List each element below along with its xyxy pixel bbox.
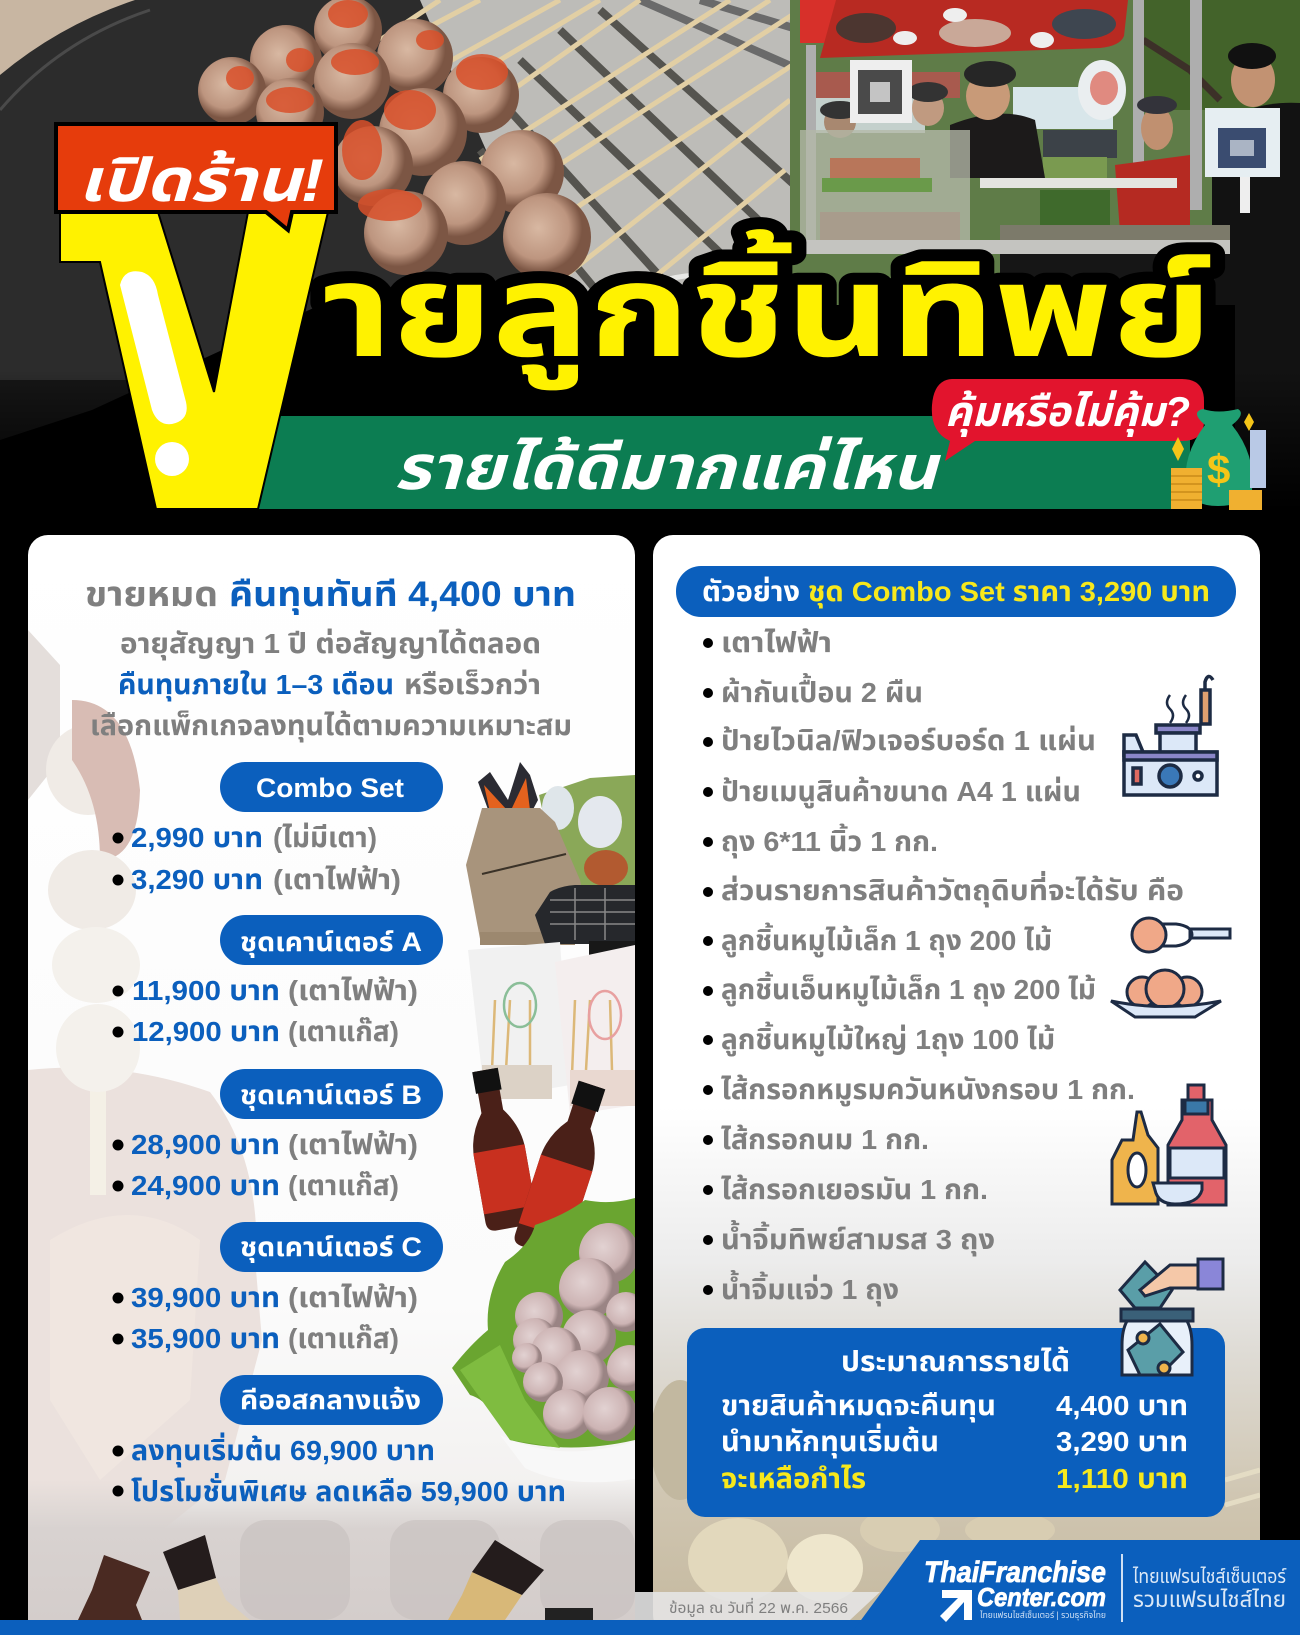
summary rows: 3,290 บาท	[1056, 1426, 1188, 1457]
intro text: หรือเร็วกว่า	[404, 669, 541, 700]
package: Counter B: (เตาไฟฟ้า)	[288, 1129, 418, 1160]
item list: ถุง 6*11 นิ้ว 1 กก.	[721, 823, 938, 858]
heading pill	[676, 566, 1236, 617]
package: Counter B: 28,900 บาท	[131, 1129, 280, 1160]
summary rows: 1,110 บาท	[1056, 1463, 1188, 1494]
package: Counter C: (เตาแก๊ส)	[288, 1323, 399, 1354]
package: outdoor kiosk	[112, 1375, 566, 1507]
intro text: คืนทุนภายใน 1–3 เดือน	[118, 669, 394, 701]
item list: เตาไฟฟ้า	[721, 627, 832, 658]
package: outdoor kiosk: ลงทุนเริ่มต้น 69,900 บาท	[131, 1432, 435, 1467]
package: Counter A	[112, 915, 443, 1047]
badge: grand opening: เปิดร้าน!	[78, 147, 324, 214]
package: Counter B: 24,900 บาท	[131, 1170, 280, 1201]
package: Counter A: 11,900 บาท	[132, 975, 280, 1006]
title black backing band	[0, 305, 1235, 510]
package: Combo Set: (เตาไฟฟ้า)	[273, 864, 401, 895]
main title: ายลูกชิ้นทิพย์	[322, 229, 1212, 390]
package: Combo Set	[112, 762, 443, 895]
package: Counter C: (เตาไฟฟ้า)	[288, 1282, 418, 1313]
item list: ลูกชิ้นหมูไม้เล็ก 1 ถุง 200 ไม้	[721, 922, 1052, 958]
summary rows: นำมาหักทุนเริ่มต้น	[721, 1423, 939, 1458]
footer bar and brand block	[0, 1540, 1300, 1635]
brand logo: ไทยแฟรนไชส์เซ็นเตอร์ | รวมธุรกิจไทย	[979, 1610, 1106, 1620]
yellow letter kho	[60, 212, 328, 509]
panel: combo set contents	[650, 535, 1260, 1635]
package: Counter B: (เตาแก๊ส)	[288, 1170, 399, 1201]
product images: meatball bags	[468, 942, 635, 1115]
package: Combo Set: 2,990 บาท	[131, 822, 263, 853]
package: Counter C	[112, 1222, 443, 1354]
intro heading	[85, 575, 576, 615]
intro heading: ขายหมด	[85, 575, 218, 614]
brand logo	[924, 1556, 1106, 1622]
summary rows: ขายสินค้าหมดจะคืนทุน	[721, 1390, 996, 1422]
panel: packages and pricing	[28, 535, 653, 1635]
heading pill: ตัวอย่าง	[702, 576, 800, 607]
product images: apron, packet, grill	[466, 762, 635, 958]
summary rows: 4,400 บาท	[1056, 1390, 1188, 1421]
faded background: meatballs	[650, 1380, 1260, 1602]
income summary box	[687, 1328, 1225, 1517]
package: Counter A: (เตาแก๊ส)	[288, 1016, 399, 1047]
glass display	[800, 130, 970, 240]
icon: meatballs on plate	[1111, 970, 1221, 1017]
data date label	[635, 1592, 880, 1620]
brand tagline	[1132, 1566, 1287, 1612]
item list: ส่วนรายการสินค้าวัตถุดิบที่จะได้รับ คือ	[721, 870, 1184, 907]
icon: money bag with coins: $	[1207, 446, 1230, 493]
icon: hand dropping money in jar	[1120, 1259, 1223, 1375]
callout: worth it or not	[932, 379, 1204, 461]
data date label: ข้อมูล ณ วันที่ 22 พ.ค. 2566	[669, 1597, 848, 1617]
green sub-heading banner	[240, 416, 1190, 509]
item list: น้ำจิ้มทิพย์สามรส 3 ถุง	[721, 1219, 995, 1256]
header photo collage	[0, 0, 1300, 448]
summary rows	[721, 1390, 1188, 1494]
summary title: ประมาณการรายได้	[841, 1346, 1070, 1377]
logo arrow	[940, 1590, 972, 1622]
package: Counter A: ชุดเคาน์เตอร์ A	[240, 927, 422, 958]
intro text	[90, 628, 572, 742]
intro text: เลือกแพ็กเกจลงทุนได้ตามความเหมาะสม	[90, 710, 572, 742]
QR signs	[850, 60, 912, 123]
package: Counter C: 39,900 บาท	[131, 1282, 280, 1313]
brand logo: Center.com	[977, 1582, 1106, 1612]
faded background: skewer and hand	[28, 630, 635, 1620]
item list: ผ้ากันเปื้อน 2 ผืน	[721, 672, 923, 708]
package: Counter B: ชุดเคาน์เตอร์ B	[240, 1080, 422, 1111]
product images: meatball bowl	[452, 1198, 653, 1482]
callout: worth it or not: คุ้มหรือไม่คุ้ม?	[945, 388, 1190, 437]
product images: bottom bottles	[78, 1535, 593, 1622]
package: outdoor kiosk: คีออสกลางแจ้ง	[240, 1385, 421, 1415]
product images: sauce bottles	[459, 1065, 618, 1260]
item list: ไส้กรอกเยอรมัน 1 กก.	[721, 1174, 988, 1205]
item list: ป้ายไวนิล/ฟิวเจอร์บอร์ด 1 แผ่น	[721, 725, 1096, 756]
heading pill: ชุด Combo Set ราคา 3,290 บาท	[808, 576, 1210, 608]
photo: pan with meatball skewers	[0, 0, 790, 440]
package: Counter C: ชุดเคาน์เตอร์ C	[240, 1232, 422, 1263]
item list: ไส้กรอกหมูรมควันหนังกรอบ 1 กก.	[721, 1074, 1135, 1107]
item list: ไส้กรอกนม 1 กก.	[721, 1124, 929, 1155]
staff	[950, 114, 1045, 178]
header fade to black	[0, 424, 1300, 508]
brand tagline: รวมแฟรนไชส์ไทย	[1133, 1587, 1286, 1612]
intro text: อายุสัญญา 1 ปี ต่อสัญญาได้ตลอด	[120, 628, 541, 660]
item list: ป้ายเมนูสินค้าขนาด A4 1 แผ่น	[721, 776, 1081, 809]
package: Combo Set: Combo Set	[256, 773, 404, 803]
icon: meatball on fork	[1132, 918, 1230, 952]
item list: น้ำจิ้มแจ่ว 1 ถุง	[721, 1269, 899, 1306]
package: Counter B	[112, 1069, 443, 1201]
icon: condiment bottles	[1112, 1085, 1226, 1205]
stall red sign	[800, 0, 836, 43]
badge: grand opening	[56, 124, 336, 230]
package: outdoor kiosk: โปรโมชั่นพิเศษ ลดเหลือ 59,900 บาท	[131, 1472, 566, 1507]
package: Counter A: (เตาไฟฟ้า)	[288, 975, 418, 1006]
brand logo: ThaiFranchise	[924, 1556, 1106, 1589]
main title: ายลูกชิ้นทิพย์	[322, 229, 1212, 390]
package: Counter C: 35,900 บาท	[131, 1323, 280, 1354]
summary rows: จะเหลือกำไร	[721, 1463, 866, 1494]
sub-heading: รายได้ดีมากแค่ไหน	[394, 434, 941, 503]
photo: franchise food stall	[790, 0, 1300, 448]
item list	[703, 627, 1184, 1306]
icon: electric stove	[1124, 676, 1217, 795]
icon: money bag with coins	[1171, 409, 1266, 510]
item list: ลูกชิ้นหมูไม้ใหญ่ 1ถุง 100 ไม้	[721, 1021, 1055, 1057]
package: Counter A: 12,900 บาท	[132, 1016, 280, 1047]
item list: ลูกชิ้นเอ็นหมูไม้เล็ก 1 ถุง 200 ไม้	[721, 971, 1096, 1007]
letter highlight and exclamation dot	[120, 271, 189, 476]
package: Combo Set: (ไม่มีเตา)	[273, 822, 377, 853]
intro heading: คืนทุนทันที 4,400 บาท	[229, 575, 576, 615]
package: Combo Set: 3,290 บาท	[131, 864, 263, 895]
